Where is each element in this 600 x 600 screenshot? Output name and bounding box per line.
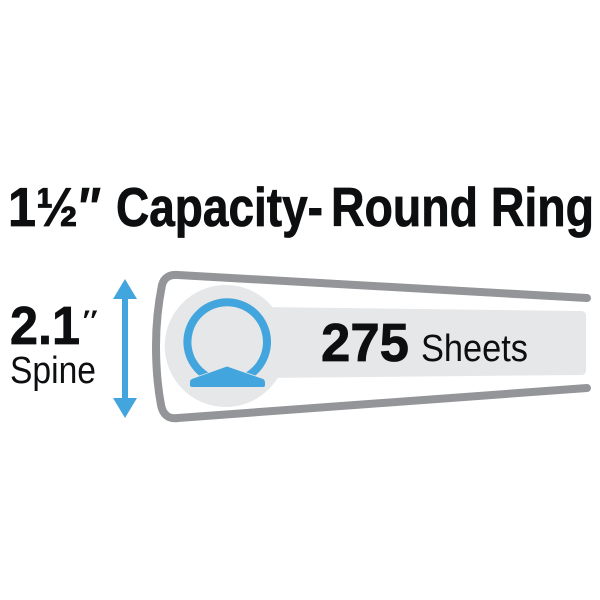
icon: double-headed spine arrow <box>113 279 137 418</box>
title: 1½ <box>8 176 78 238</box>
spine measurement label: Spine <box>10 350 96 392</box>
sheet count: 275 <box>321 313 409 373</box>
title: ″ <box>79 176 101 238</box>
title: Capacity- <box>116 176 323 238</box>
spine measurement label: 2.1 <box>10 296 80 356</box>
spine measurement label <box>10 296 99 392</box>
title <box>8 176 594 238</box>
spine measurement label: ″ <box>82 305 99 338</box>
icon: round ring with mechanism <box>187 302 267 387</box>
sheet count: Sheets <box>421 328 528 370</box>
ring backdrop circle <box>165 285 287 407</box>
sheet count <box>321 313 528 373</box>
sheet capacity bar <box>262 307 586 378</box>
binder outline <box>156 275 587 418</box>
